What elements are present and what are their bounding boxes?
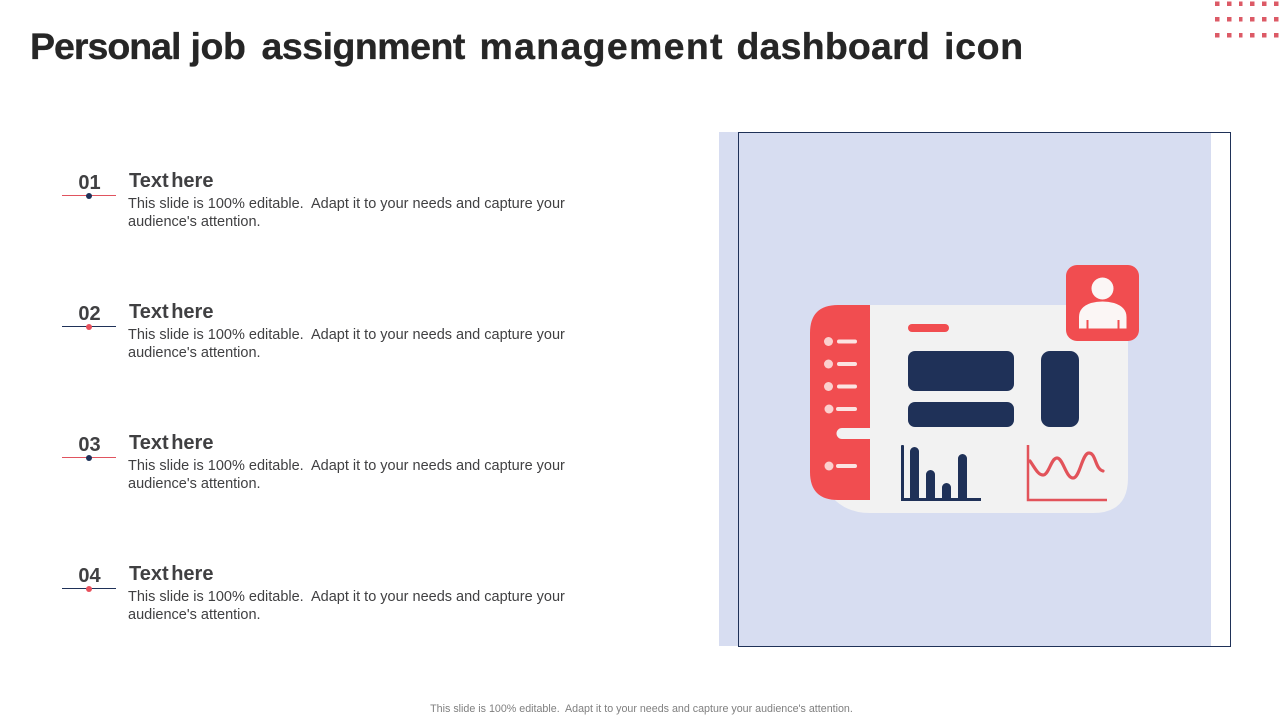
list item 03: This slide is 100% editable. Adapt it to your needs and capture your [128, 458, 565, 474]
list item 01 [62, 170, 565, 230]
user badge [1066, 265, 1139, 341]
list item 02 [62, 301, 565, 361]
list item 02: 02 [78, 303, 101, 325]
list item 02: audience's attention. [128, 345, 261, 361]
list item 01: 01 [78, 172, 101, 194]
sidebar list [824, 337, 855, 470]
title: Personal [30, 25, 180, 67]
title: dashboard [736, 25, 930, 67]
list item 03: 03 [78, 434, 101, 456]
title: job [190, 25, 246, 67]
bar chart [901, 445, 981, 501]
list item 01: Text here [129, 170, 213, 192]
title: assignment [262, 25, 465, 67]
list item 03 [62, 432, 565, 492]
card body [825, 305, 1128, 513]
panel: light blue background [719, 132, 1211, 646]
list item 03: audience's attention. [128, 476, 261, 492]
list item 01: audience's attention. [128, 214, 261, 230]
footer note: This slide is 100% editable. Adapt it to your needs and capture your audience's attention. [430, 703, 853, 715]
line chart [1028, 445, 1107, 500]
list item 04: audience's attention. [128, 607, 261, 623]
decorative dot grid [1215, 2, 1278, 38]
list item 04: 04 [78, 565, 101, 587]
navy blocks [908, 351, 1079, 427]
list item 04: This slide is 100% editable. Adapt it to your needs and capture your [128, 589, 565, 605]
panel: navy outline [738, 132, 1231, 647]
red label bar [908, 324, 949, 332]
list item 04 [62, 563, 565, 623]
list item 03: Text here [129, 432, 213, 454]
list item 02: Text here [129, 301, 213, 323]
title: management [480, 25, 724, 67]
title: icon [944, 25, 1024, 67]
title [30, 25, 1024, 67]
red sidebar [810, 305, 870, 500]
list item 02: This slide is 100% editable. Adapt it to your needs and capture your [128, 327, 565, 343]
list item 01: This slide is 100% editable. Adapt it to your needs and capture your [128, 196, 565, 212]
list item 04: Text here [129, 563, 213, 585]
